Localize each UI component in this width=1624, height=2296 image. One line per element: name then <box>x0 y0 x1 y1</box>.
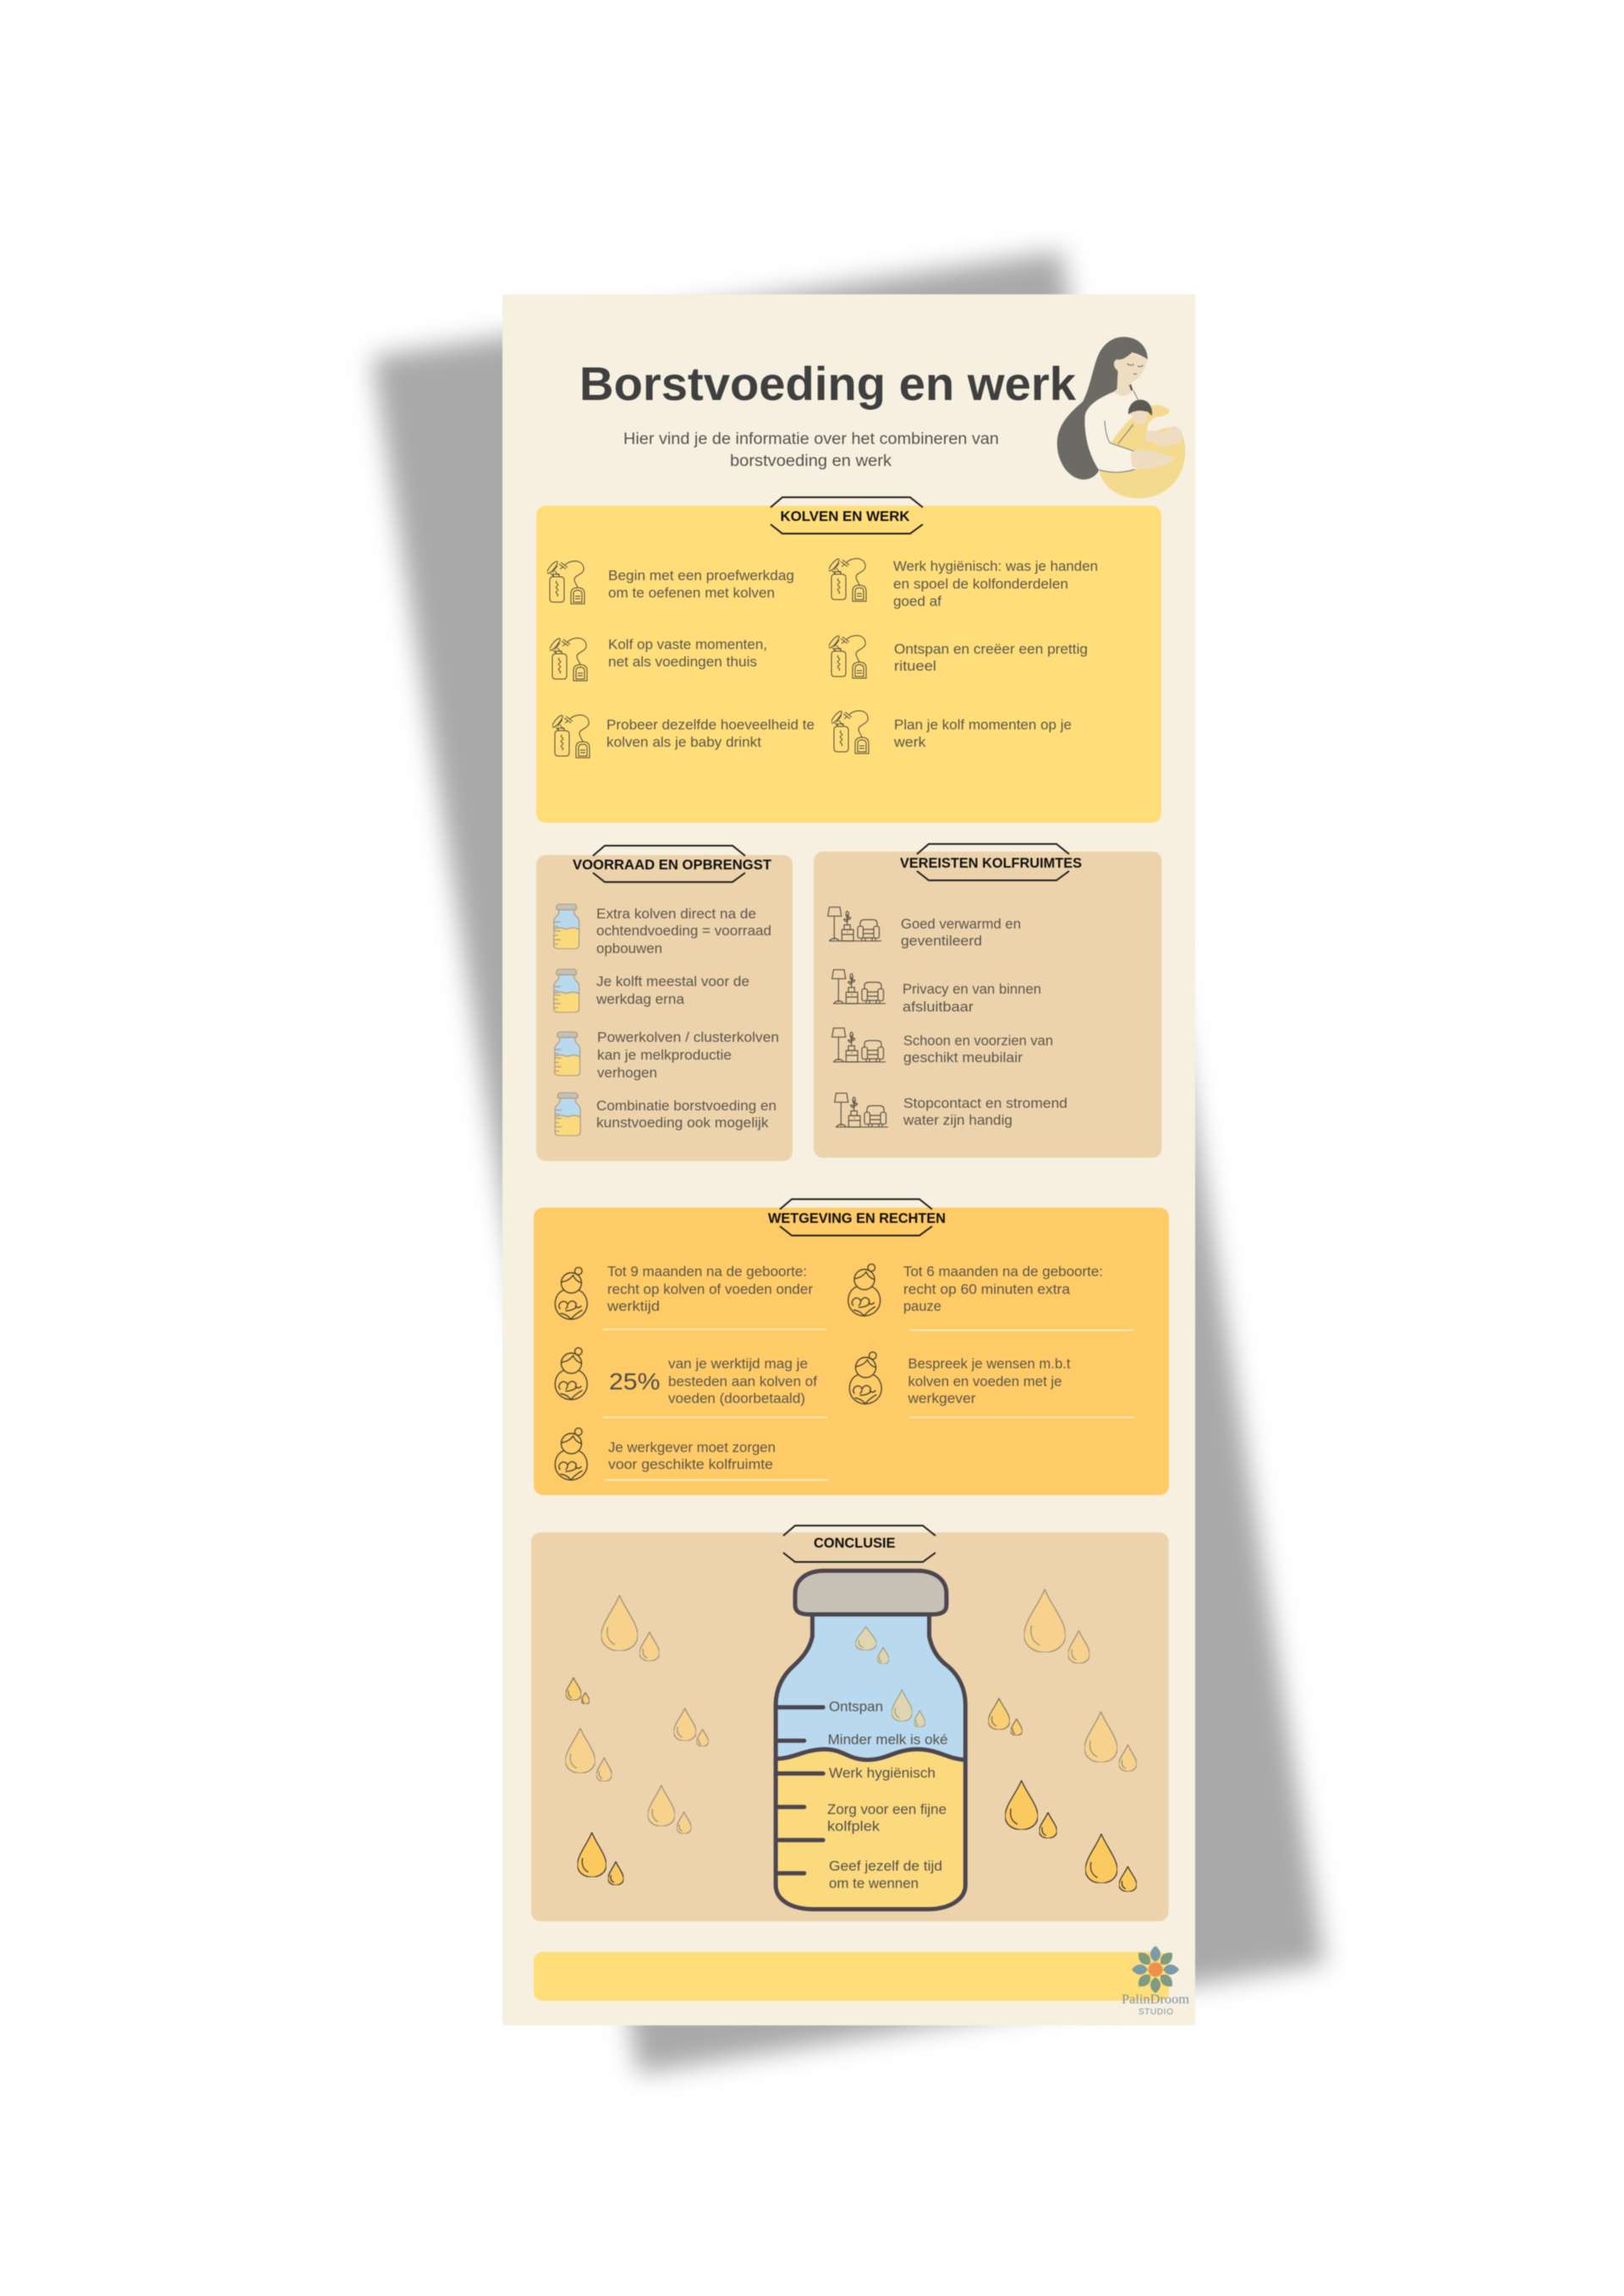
item: tot 6 maanden: recht op 60 minuten extra <box>903 1281 1071 1297</box>
item: extra kolven <box>554 904 771 956</box>
item: schoon: Schoon en voorzien van <box>903 1033 1053 1049</box>
item: tot 9 maanden: werktijd <box>606 1298 660 1314</box>
heading: wetgeving en rechten: WETGEVING EN RECHTEN <box>768 1210 946 1226</box>
footer bar <box>534 1952 1169 2001</box>
item: privacy <box>832 970 1041 1015</box>
item: proefwerkdag: om te oefenen met kolven <box>608 585 775 600</box>
illustration: mother breastfeeding baby <box>1057 337 1185 498</box>
item: verwarmd <box>828 907 1021 949</box>
heading: voorraad en opbrengst <box>573 846 772 882</box>
subtitle: Hier vind je de informatie over het combineren van <box>623 430 999 448</box>
heading: kolven en werk: KOLVEN EN WERK <box>780 508 910 524</box>
bottle level labels: Geef jezelf de tijd <box>829 1858 942 1874</box>
subtitle: borstvoeding en werk <box>730 452 892 470</box>
item: proefwerkdag <box>546 560 794 604</box>
decorative drops <box>565 1589 1137 1892</box>
item: stopcontact: Stopcontact en stromend <box>903 1095 1067 1111</box>
bottle level labels <box>827 1699 948 1891</box>
item: vaste momenten: Kolf op vaste momenten, <box>608 636 767 653</box>
item: powerkolven: kan je melkproductie <box>597 1047 732 1063</box>
item: bespreek: kolven en voeden met je <box>908 1373 1062 1389</box>
item: combinatie <box>555 1093 776 1136</box>
item: meestal: Je kolft meestal voor de <box>596 973 749 989</box>
heading: voorraad en opbrengst: VOORRAAD EN OPBRENGST <box>573 857 772 873</box>
logo: PalinDroom Studio: PalinDroom <box>1122 1992 1190 2007</box>
item: combinatie: kunstvoeding ook mogelijk <box>596 1115 769 1131</box>
item: geschikte kolfruimte: voor geschikte kolfruimte <box>608 1456 773 1472</box>
item: geschikte kolfruimte <box>555 1428 776 1480</box>
subtitle <box>623 430 999 470</box>
item: schoon <box>832 1028 1053 1066</box>
item: 25 procent: 25% <box>609 1368 660 1395</box>
item: plan momenten: Plan je kolf momenten op je <box>894 717 1072 732</box>
heading: vereisten kolfruimtes <box>900 844 1082 880</box>
item: vaste momenten: net als voedingen thuis <box>608 654 757 670</box>
item: plan momenten <box>830 710 1072 753</box>
item: bespreek: werkgever <box>907 1390 976 1406</box>
item: hygiënisch <box>827 557 1098 609</box>
item: geschikte kolfruimte: Je werkgever moet zorgen <box>608 1439 776 1455</box>
item: 25 procent <box>555 1348 817 1406</box>
item: ontspan: ritueel <box>894 658 936 674</box>
bottle level labels: kolfplek <box>827 1818 881 1834</box>
item: combinatie: Combinatie borstvoeding en <box>596 1098 776 1114</box>
item: extra kolven: Extra kolven direct na de <box>596 906 756 922</box>
item: ontspan <box>827 634 1088 678</box>
item: tot 9 maanden: Tot 9 maanden na de geboorte: <box>607 1263 807 1280</box>
item: plan momenten: werk <box>893 734 926 750</box>
item: tot 6 maanden <box>848 1263 1103 1316</box>
item: verwarmd: geventileerd <box>901 933 982 949</box>
item: bespreek: Bespreek je wensen m.b.t <box>908 1356 1071 1372</box>
bottle level labels: om te wennen <box>829 1876 919 1891</box>
item: extra kolven: opbouwen <box>596 940 662 956</box>
heading: conclusie <box>783 1526 935 1562</box>
item: 25 procent: van je werktijd mag je <box>668 1356 808 1372</box>
heading: conclusie: CONCLUSIE <box>814 1535 895 1551</box>
item: tot 6 maanden: Tot 6 maanden na de geboorte: <box>903 1263 1103 1280</box>
item: tot 9 maanden: recht op kolven of voeden onder <box>607 1281 813 1297</box>
item: stopcontact: water zijn handig <box>903 1112 1012 1128</box>
bottle level labels: Werk hygiënisch <box>829 1765 935 1781</box>
item: 25 procent: besteden aan kolven of <box>668 1373 817 1389</box>
item: 25 procent: voeden (doorbetaald) <box>668 1390 805 1406</box>
item: hygiënisch: en spoel de kolfonderdelen <box>893 576 1068 592</box>
item: powerkolven: verhogen <box>597 1065 657 1081</box>
item: bespreek <box>849 1352 1071 1406</box>
item: powerkolven: Powerkolven / clusterkolven <box>597 1029 779 1045</box>
item: tot 6 maanden: pauze <box>903 1298 941 1314</box>
item: meestal <box>554 969 749 1012</box>
item: privacy: afsluitbaar <box>903 999 974 1015</box>
item: powerkolven <box>555 1029 779 1081</box>
item: meestal: werkdag erna <box>595 991 685 1007</box>
bottle level labels: Minder melk is oké <box>828 1732 948 1748</box>
item: privacy: Privacy en van binnen <box>903 981 1041 997</box>
item: dezelfde hoeveelheid: Probeer dezelfde hoeveelheid te <box>606 717 815 732</box>
item: vaste momenten <box>548 636 767 681</box>
panel: vereisten kolfruimtes <box>814 844 1162 1158</box>
panel: voorraad en opbrengst <box>536 846 793 1161</box>
drop shadow behind card <box>372 251 1325 2074</box>
heading: kolven en werk <box>771 497 923 534</box>
infographic card background <box>502 294 1195 2025</box>
logo: PalinDroom Studio: STUDIO <box>1138 2008 1173 2017</box>
title: Borstvoeding en werk <box>579 357 1077 410</box>
item: extra kolven: ochtendvoeding = voorraad <box>596 923 771 939</box>
item: proefwerkdag: Begin met een proefwerkdag <box>608 567 794 584</box>
heading: vereisten kolfruimtes: VEREISTEN KOLFRUIMTES <box>900 855 1082 871</box>
bottle level labels: Zorg voor een fijne <box>827 1801 946 1817</box>
item: dezelfde hoeveelheid <box>551 714 815 758</box>
item: dezelfde hoeveelheid: kolven als je baby drinkt <box>606 734 761 750</box>
panel: conclusie <box>531 1526 1169 1921</box>
heading: wetgeving en rechten <box>768 1199 946 1236</box>
panel: wetgeving en rechten <box>534 1199 1169 1495</box>
item: tot 9 maanden <box>555 1263 813 1319</box>
item: ontspan: Ontspan en creëer een prettig <box>894 641 1088 657</box>
panel: kolven en werk <box>536 497 1161 823</box>
item: schoon: geschikt meubilair <box>903 1049 1023 1066</box>
item: hygiënisch: Werk hygiënisch: was je handen <box>893 558 1098 574</box>
item: stopcontact <box>835 1093 1067 1128</box>
item: verwarmd: Goed verwarmd en <box>901 916 1021 932</box>
item: hygiënisch: goed af <box>893 594 941 609</box>
chart: milk bottle <box>776 1570 965 1910</box>
logo: PalinDroom Studio <box>1122 1946 1190 2017</box>
bottle level labels: Ontspan <box>829 1699 883 1715</box>
